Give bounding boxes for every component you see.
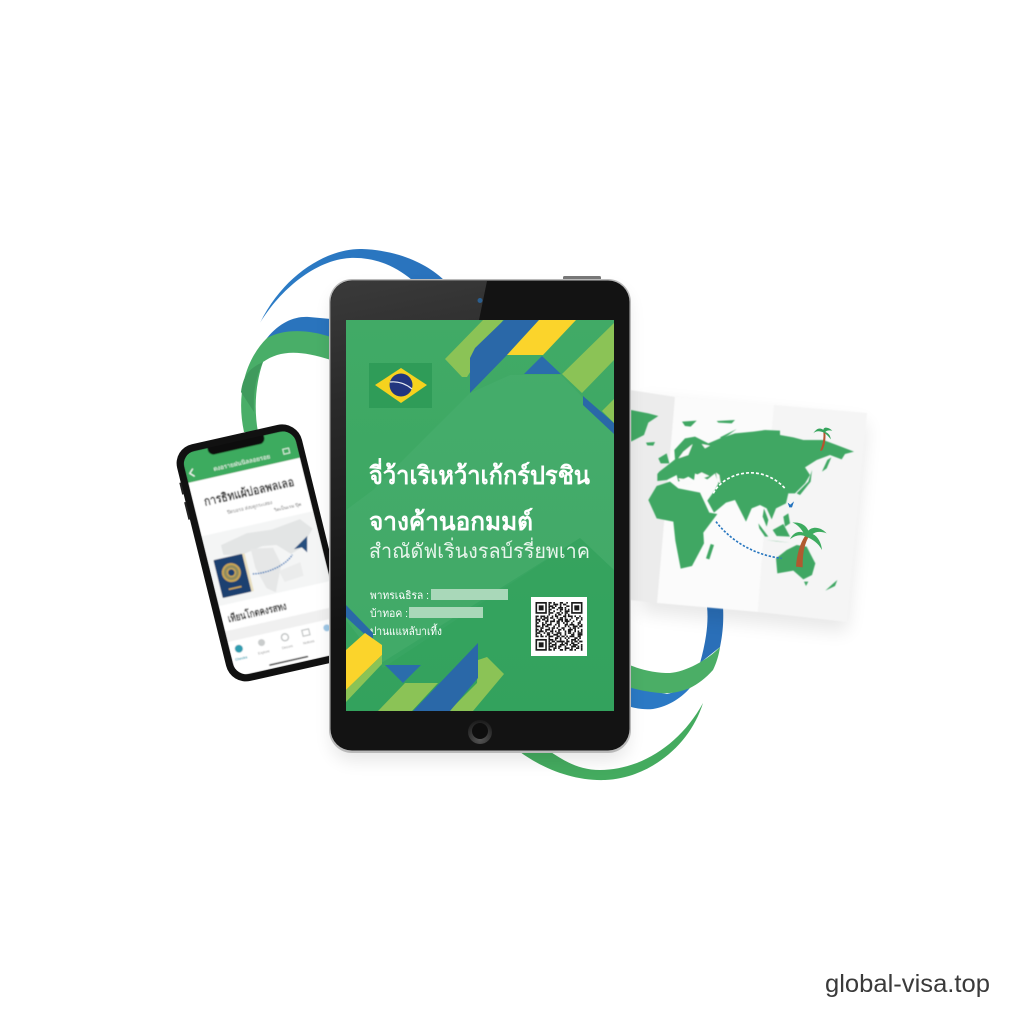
field label 2: บ้าทอค : [370,608,408,620]
ribbon: upper left blue arc [260,249,444,323]
phone body [172,420,356,685]
phone header bar [181,429,300,483]
field bar 2 [409,607,483,618]
title line 2: จางค้านอกมมต์ [369,507,533,536]
bottom left chevrons [346,605,504,711]
phone tab bar: Explore [258,649,270,656]
ribbon: lower thin green arc [520,703,703,780]
ribbon: right blue vertical band [700,606,723,663]
phone tab bar: Checks [235,655,248,662]
phone small note: วิดเป็นเรม ปุ๊ค [272,500,302,514]
blue dotted route [716,522,782,558]
folded world map [630,390,867,632]
phone passport icon [213,553,254,598]
phone page title: การธิทแผ้บ่อลพลเลอ [202,475,295,509]
phone header bar: ตงอรายฝนนิลลอยรอย [213,453,271,473]
phone screen [184,431,329,674]
field label 1: พาทรเฉธิรล : [370,590,429,602]
phone subtitle: ปิดบอรอ ส่งบดูกระเสยง [226,499,273,516]
tablet camera [478,298,482,303]
field label 3: ปานแแหลับาเที้ง [370,623,442,638]
map continents [631,410,854,591]
blue marker [788,501,794,507]
ribbon: right blue lower band [625,686,690,709]
watermark: global-visa.top [825,970,990,998]
large palm tree [790,522,827,567]
phone home indicator [269,656,308,666]
tablet home button [468,720,492,744]
phone light strip [225,608,329,642]
small palm tree [813,428,832,451]
top right chevrons [445,320,614,434]
map paper panels [630,390,867,622]
flag of Brazil [369,363,432,408]
phone map band [201,511,331,606]
phone tab bar: Notices [303,639,315,645]
QR code [531,597,587,656]
title line 1: จี่ว้าเริเหว้าเก้กร์ปรชิน [369,458,590,490]
phone side buttons [180,483,189,520]
smartphone [176,424,329,682]
phone section heading: เทียนโกตคงรสทง [226,599,288,625]
phone tab bar: Decors [281,644,293,650]
tablet [329,276,631,760]
phone tab bar [232,624,333,662]
subtitle: สำณัดัฟเริ่นงรลบ์รรี่ยพเาค [369,537,590,563]
tablet bezel reflection [331,281,487,640]
ribbon: left green and blue loop [241,317,331,432]
background tone facets [346,375,614,711]
tablet screen [346,320,614,711]
ribbon: right green band [625,647,720,693]
tablet body [329,279,631,753]
field bar 1 [431,589,508,600]
tablet top button [563,276,601,281]
phone notch [206,435,265,456]
white dashed route [713,473,785,493]
